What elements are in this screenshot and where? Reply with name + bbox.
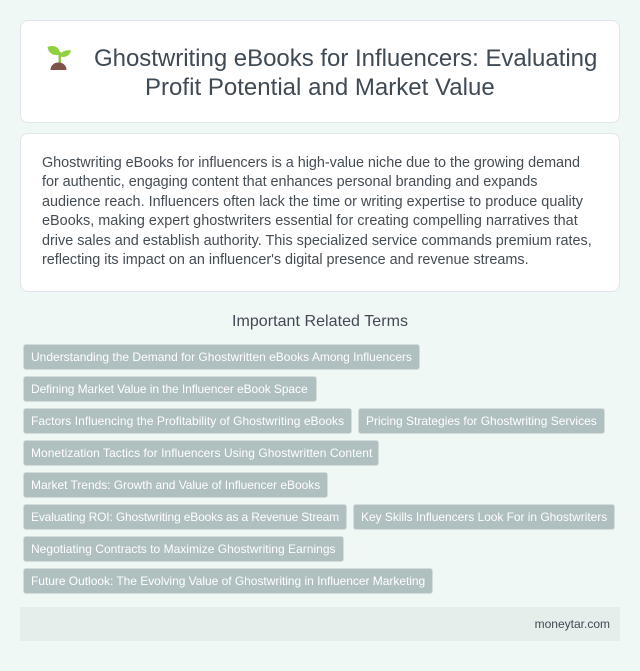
tag xyxy=(23,472,328,498)
tag: Evaluating ROI: Ghostwriting eBooks as a Revenue Stream xyxy=(31,510,339,524)
tag xyxy=(23,408,352,434)
tag: Understanding the Demand for Ghostwritten eBooks Among Influencers xyxy=(31,350,412,364)
tag xyxy=(23,376,317,402)
title card xyxy=(20,20,620,123)
tag: Defining Market Value in the Influencer eBook Space xyxy=(31,382,308,396)
icon: seedling xyxy=(48,46,71,70)
tag: Monetization Tactics for Influencers Using Ghostwritten Content xyxy=(31,446,372,460)
footer xyxy=(20,607,620,641)
tag xyxy=(23,568,433,594)
title: Profit Potential and Market Value xyxy=(145,74,495,101)
tag: Key Skills Influencers Look For in Ghostwriters xyxy=(361,510,607,524)
summary text: eBooks, making expert ghostwriters essential for creating compelling narratives that xyxy=(42,213,578,229)
summary text: Ghostwriting eBooks for influencers is a high-value niche due to the growing demand xyxy=(42,155,580,171)
summary text: drive sales and establish authority. This specialized service commands premium rates, xyxy=(42,233,592,249)
summary text: for authentic, engaging content that enhances personal branding and expands xyxy=(42,174,537,190)
summary text: audience reach. Influencers often lack the time or writing expertise to produce quality xyxy=(42,194,583,210)
tag: Negotiating Contracts to Maximize Ghostwriting Earnings xyxy=(31,542,336,556)
tag: Future Outlook: The Evolving Value of Ghostwriting in Influencer Marketing xyxy=(31,574,425,588)
tag xyxy=(23,504,347,530)
footer: moneytar.com xyxy=(535,617,610,631)
related terms tags xyxy=(23,344,615,594)
tag xyxy=(23,344,420,370)
section heading: Important Related Terms xyxy=(232,313,408,330)
tag: Market Trends: Growth and Value of Influencer eBooks xyxy=(31,478,320,492)
tag: Factors Influencing the Profitability of Ghostwriting eBooks xyxy=(31,414,344,428)
tag: Pricing Strategies for Ghostwriting Services xyxy=(366,414,597,428)
summary text: reflecting its impact on an influencer's digital presence and revenue streams. xyxy=(42,252,529,268)
tag xyxy=(23,440,379,466)
tag xyxy=(353,504,615,530)
summary text xyxy=(42,155,592,268)
tag xyxy=(23,536,344,562)
title: Ghostwriting eBooks for Influencers: Evaluating xyxy=(94,45,597,72)
title xyxy=(94,45,597,101)
tag xyxy=(358,408,605,434)
summary panel xyxy=(20,133,620,292)
